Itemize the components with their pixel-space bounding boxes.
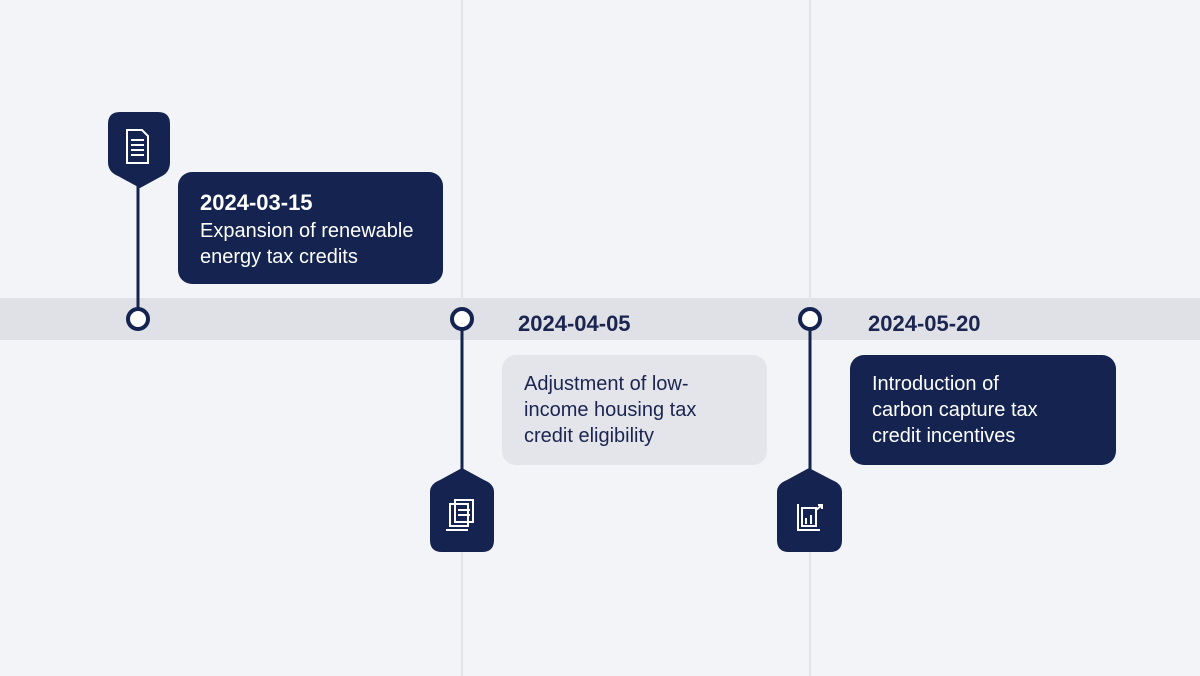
card 1: 2024-03-15	[200, 190, 313, 215]
card 3	[850, 355, 1116, 465]
date 3: 2024-05-20	[868, 311, 981, 336]
card 3: Introduction of	[872, 373, 999, 395]
marker 3	[777, 309, 842, 552]
icon: document	[127, 130, 148, 163]
card 1: Expansion of renewable	[200, 220, 413, 242]
marker 1	[108, 112, 170, 329]
icon: stacked documents	[446, 500, 473, 530]
card 2	[502, 355, 767, 465]
date 2: 2024-04-05	[518, 311, 631, 336]
card 2: income housing tax	[524, 399, 696, 421]
card 2: Adjustment of low-	[524, 373, 689, 395]
guide lines	[461, 0, 463, 676]
card 3: carbon capture tax	[872, 399, 1038, 421]
marker 2	[430, 309, 494, 552]
timeline band	[0, 298, 1200, 340]
card 2: credit eligibility	[524, 425, 654, 447]
icon: chart report	[798, 504, 822, 530]
card 1: energy tax credits	[200, 246, 358, 268]
card 1	[178, 172, 443, 284]
card 3: credit incentives	[872, 425, 1015, 447]
